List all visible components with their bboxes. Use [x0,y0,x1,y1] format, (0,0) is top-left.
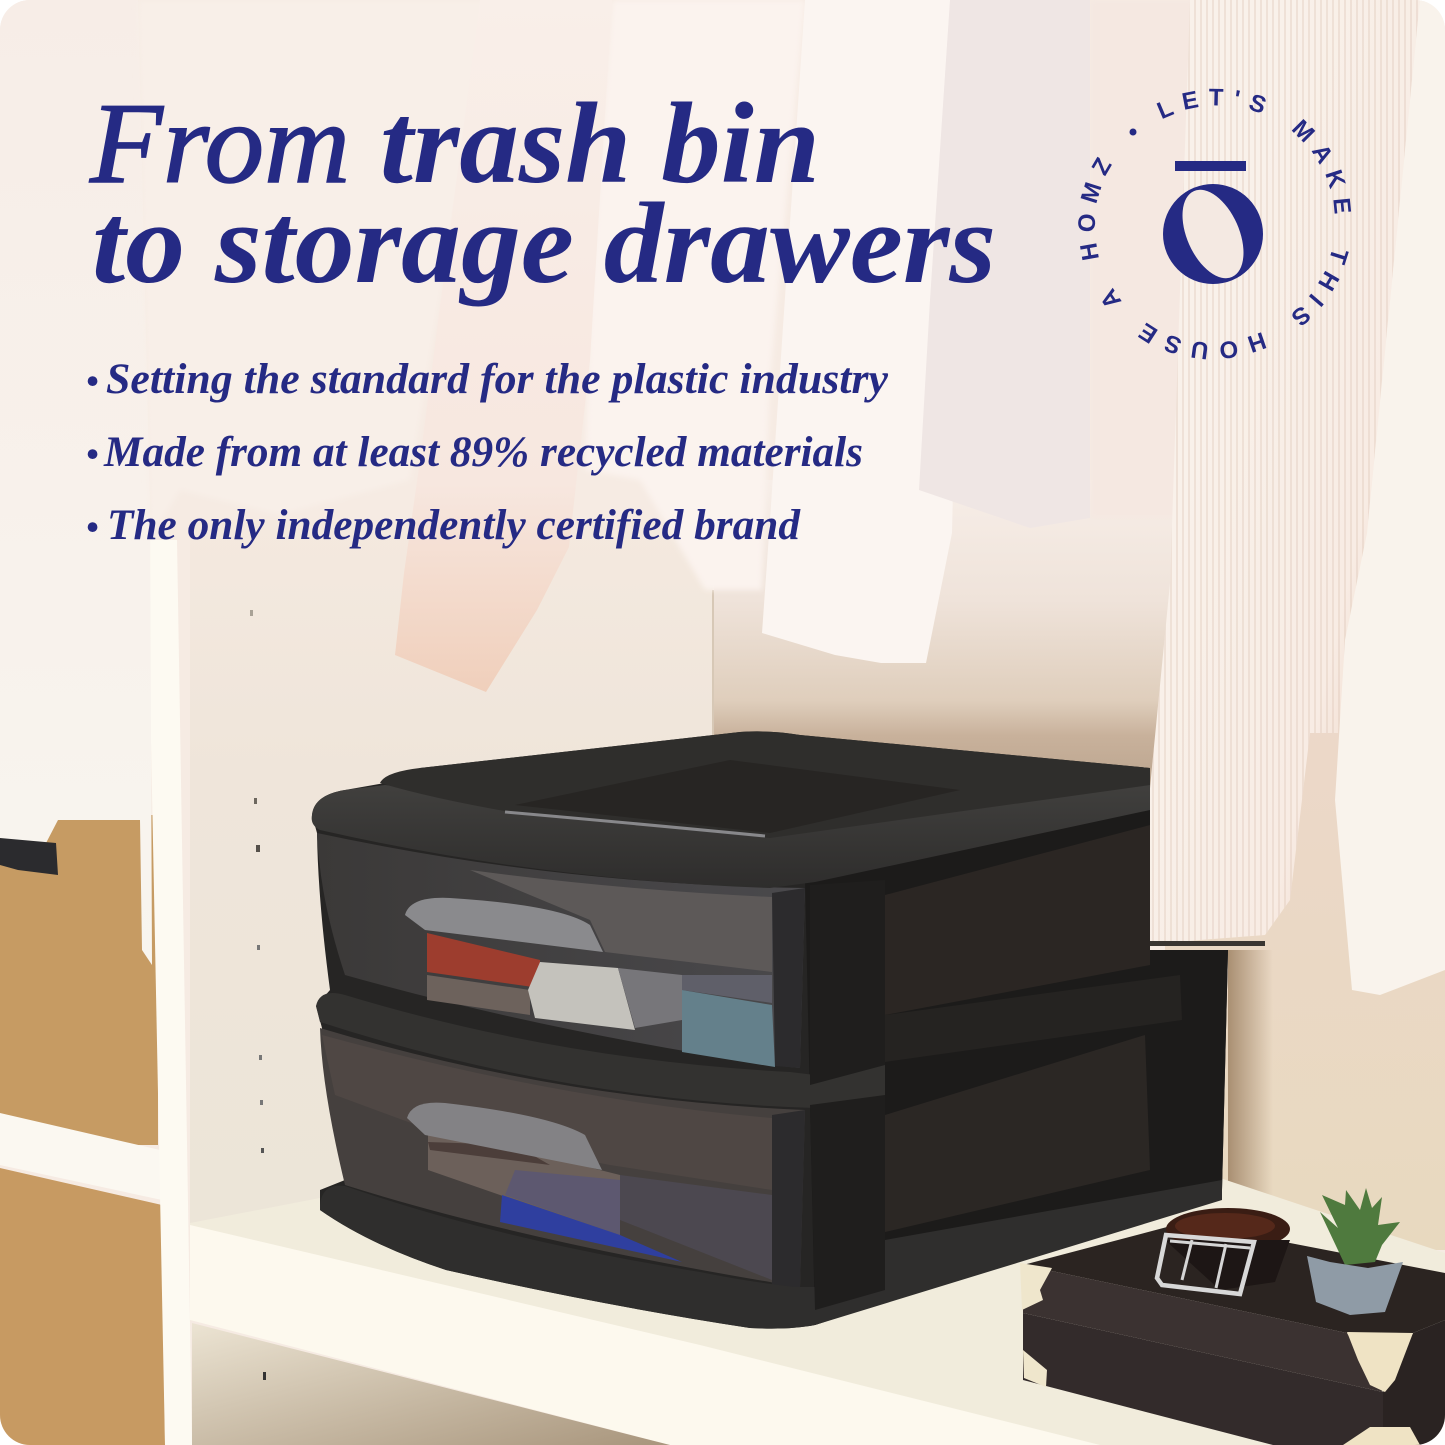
right sweaters [1148,0,1445,995]
circular tagline: LET'S MAKE THIS HOUSE A HOMZ [1078,88,1352,360]
lid [380,731,1150,838]
sweater black hem [0,838,58,875]
box side [1383,1320,1445,1445]
left knit sweater [0,485,152,965]
front posts [810,1062,885,1085]
left cardboard boxes and rail [0,815,165,1445]
succulent plant [1307,1188,1403,1315]
logo bar [1175,161,1246,171]
box lid face [1023,1265,1383,1392]
bullet list: The only independently certified brand [107,502,802,549]
shelf front lip [190,1225,1100,1445]
middle rim [316,993,885,1108]
hanging clothes [0,0,1195,965]
shelf [190,1178,1445,1445]
logo badge [1078,88,1352,360]
bullet list [86,356,889,549]
belt with buckle [1157,1208,1290,1294]
top rim [312,785,1150,888]
box top [1023,1227,1445,1333]
pink knit sleeve [395,245,596,692]
logo ring [1163,180,1263,288]
side panels [885,825,1150,1015]
lavender sweater [919,0,955,502]
shoe box [1020,1227,1445,1445]
brass corners [1020,1263,1052,1310]
top drawer [317,833,805,1068]
bullet list: Made from at least 89% recycled materials [103,429,863,476]
title: From trash bin [89,80,820,208]
bullet list: • [86,434,99,474]
under-shelf opening [192,1323,670,1445]
drawer unit silhouette [312,731,1228,1329]
bottom drawer [320,1028,805,1288]
title [88,102,992,306]
bullet list: Setting the standard for the plastic industry [106,356,889,403]
box lower front [1023,1313,1383,1445]
title: to storage drawers [92,180,996,308]
vertical cabinet panel [147,540,264,1445]
white ribbed sleeve [762,0,955,663]
bullet list: • [86,361,99,401]
drawer unit body [805,790,1228,1325]
ring dot [1130,128,1136,136]
middle side rail [885,975,1182,1062]
bottom rim [320,1180,1222,1329]
bullet list: • [86,507,99,547]
pale upper clothes [587,2,802,593]
storage drawers [312,731,1228,1329]
